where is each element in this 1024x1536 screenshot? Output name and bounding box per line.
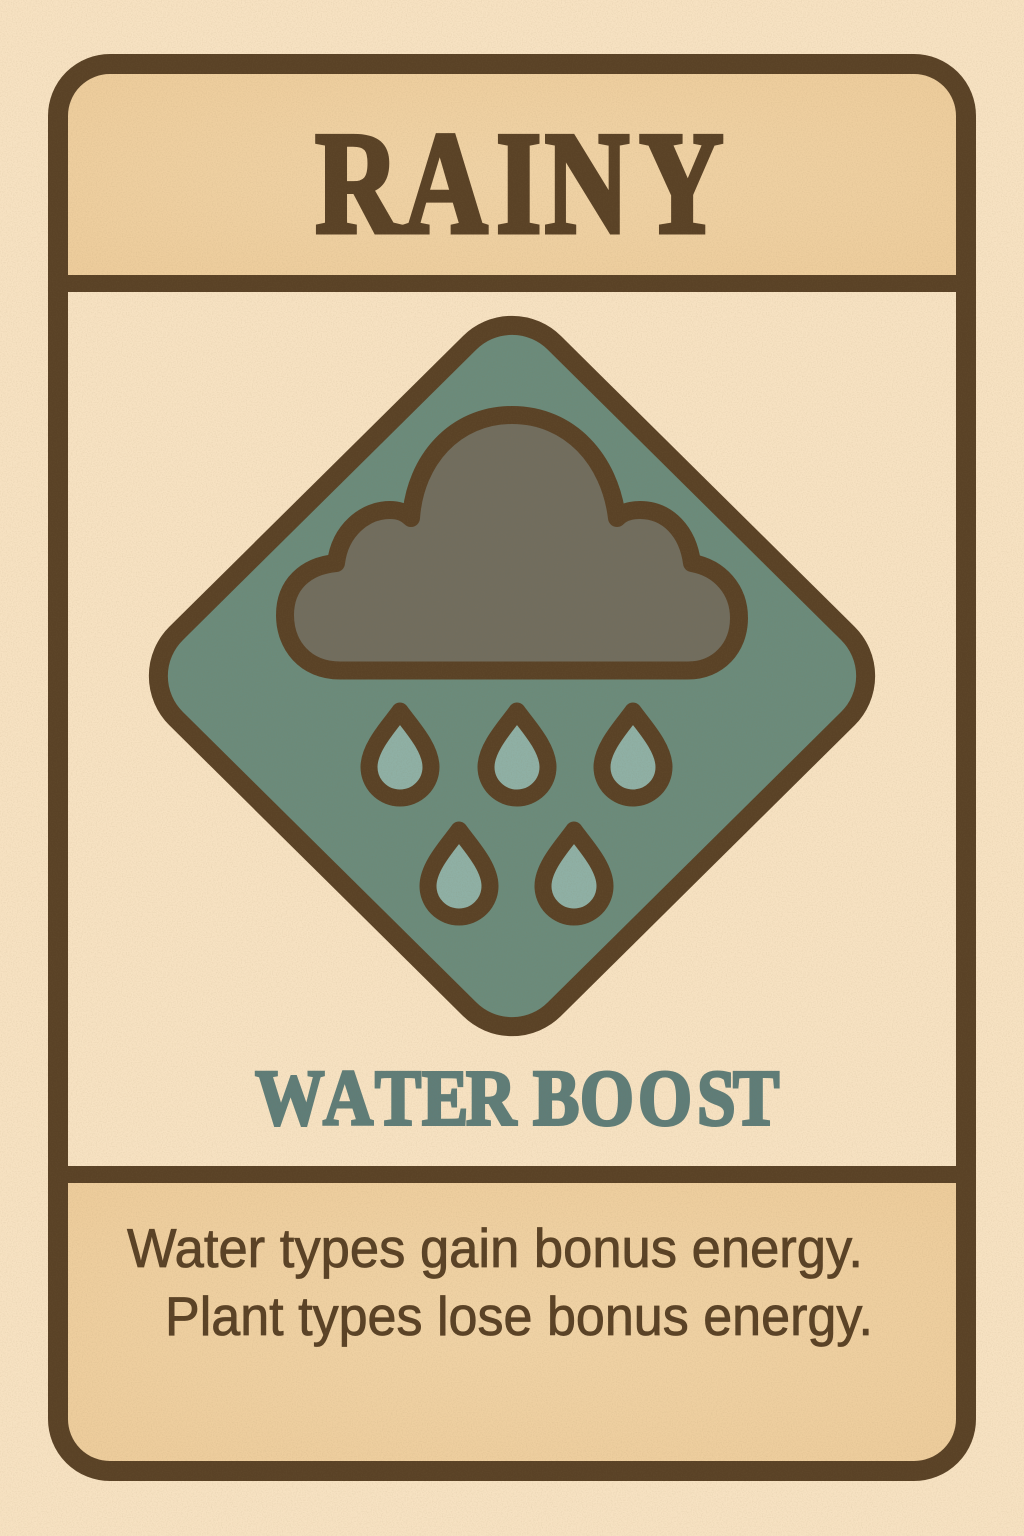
diamond badge xyxy=(158,325,866,1027)
effect description xyxy=(127,1217,873,1347)
effect line two: Plant types lose bonus energy. xyxy=(165,1285,873,1347)
header divider xyxy=(58,275,966,292)
panel: header band xyxy=(58,64,966,284)
effect line one: Water types gain bonus energy. xyxy=(127,1217,863,1279)
panel: footer band xyxy=(58,1174,966,1471)
subtitle: WATER BOOST xyxy=(255,1055,779,1143)
icon: cloud xyxy=(285,415,739,670)
icon: raindrops xyxy=(369,711,664,917)
footer divider xyxy=(58,1166,966,1183)
title: RAINY xyxy=(315,102,724,264)
icon: rainy weather diamond xyxy=(158,325,866,1027)
